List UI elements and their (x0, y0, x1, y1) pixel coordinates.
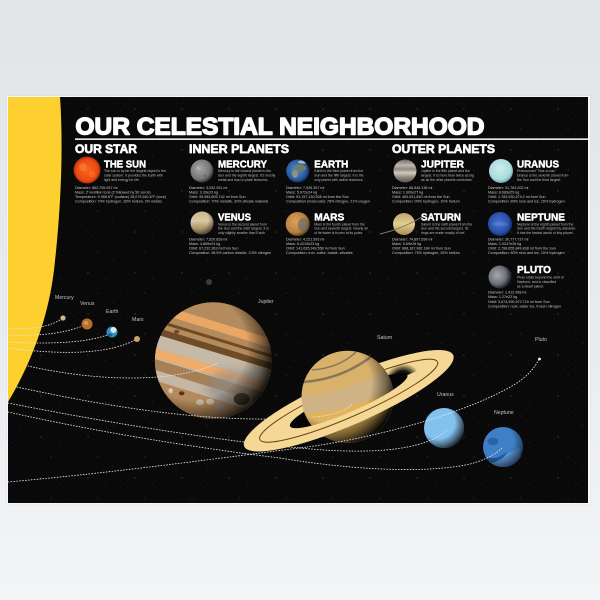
description (421, 222, 472, 235)
stats: Diameter: 3,032.291 mi (189, 186, 228, 190)
stats (488, 186, 565, 204)
stats: Orbit: 888,187,982.184 mi from Sun (392, 247, 451, 251)
description (218, 222, 269, 235)
stats: Mass: 1.0247e26 kg (488, 242, 521, 246)
stats (392, 237, 460, 255)
description: Sun and the fourth largest by diameter. (517, 227, 576, 231)
poster (6, 96, 590, 506)
stats: Diameter: 30,777.737 mi (488, 237, 529, 241)
description: Sun and the second largest. Its (421, 227, 469, 231)
icon: earth (286, 160, 309, 182)
description (517, 222, 576, 235)
description: Saturn is the sixth planet from the (421, 222, 472, 226)
panel: saturn (380, 212, 472, 255)
stats (286, 186, 370, 204)
planet labels: Saturn (377, 335, 392, 341)
stats: Composition: 70% hydrogen, 28% helium, 2% metals (75, 200, 162, 204)
planet: mars (134, 336, 140, 342)
stats: Composition: iron, sulfur, basalt, silicates (286, 251, 353, 255)
planet labels: Uranus (437, 392, 454, 398)
stats: Mass: 5.69e26 kg (392, 242, 421, 246)
stats: Diameter: 88,846.138 mi (392, 186, 433, 190)
name: JUPITER (421, 160, 464, 171)
name: MARS (314, 212, 344, 223)
star: faint dot (206, 279, 212, 285)
planet labels: Neptune (494, 410, 514, 416)
planet labels: Mars (132, 317, 144, 323)
description: the Sun and the third largest. (517, 178, 561, 182)
panel: uranus (488, 159, 569, 204)
stats: Mass: 3.30e23 kg (189, 191, 218, 195)
ring shadow (382, 360, 422, 394)
stats: Orbit: 1,783,930,479.2 mi from Sun (488, 195, 546, 199)
heading: our star: OUR STAR (75, 143, 138, 156)
stats (286, 237, 353, 255)
planet labels: Venus (80, 301, 95, 307)
planet: neptune (483, 427, 523, 470)
name: VENUS (218, 212, 251, 223)
description: Sun and the eighth largest. It's mostly (218, 174, 275, 178)
name: MERCURY (218, 160, 267, 171)
stats: Mass: 5.972e24 kg (286, 191, 317, 195)
stats: Mass: 1.900e27 kg (392, 191, 423, 195)
globe (300, 351, 395, 445)
stats: Diameter: 863,705.937 mi (75, 186, 118, 190)
planet labels: Earth (106, 309, 119, 315)
sun edge (8, 97, 62, 402)
description: the Sun and the sixth largest. It is (218, 227, 269, 231)
description (517, 169, 569, 182)
name: NEPTUNE (517, 212, 565, 223)
description: only slightly smaller than Earth. (218, 231, 266, 235)
stats: Mass: 6.4219e23 kg (286, 242, 319, 246)
panel: neptune (488, 212, 576, 255)
name: THE SUN (104, 160, 146, 171)
description: Mercury is the closest planet to the (218, 169, 271, 173)
stats: Orbit: 3,674,490,972.719 mi from Sun (488, 300, 550, 304)
stats: Orbit: 2,798,655,849.838 mi from the Sun (488, 247, 556, 251)
stats: Orbit: 35,983,605.742 mi from Sun (189, 195, 246, 199)
stats (488, 291, 561, 309)
description: only planet with active tectonics. (314, 178, 363, 182)
description: as a dwarf planet. (517, 284, 544, 288)
planet: jupiter (154, 302, 272, 420)
rings: front half (244, 355, 463, 468)
stats: Composition: 90% hydrogen, 10% helium (392, 200, 460, 204)
description: light and energy for life. (104, 178, 140, 182)
rings: back half (235, 333, 463, 468)
icon: mercury (190, 160, 214, 182)
planet: saturn (244, 350, 454, 452)
description: Mars is the fourth planet from the (314, 222, 365, 226)
stats (392, 186, 460, 204)
icon: saturn (380, 213, 422, 235)
icon: venus (190, 212, 214, 234)
panel: earth (286, 160, 370, 204)
description (517, 276, 564, 288)
orbit lines over outer planets (280, 359, 539, 470)
panel: venus (189, 212, 271, 255)
icon: neptune (488, 212, 512, 236)
description: solar system. It provides the Earth with (104, 174, 163, 178)
title: OUR CELESTIAL NEIGHBORHOOD (76, 114, 484, 141)
title rule (75, 138, 588, 140)
stats: Orbit: 67,232,363 mi from Sun (189, 247, 238, 251)
description: largest. It is more than twice as big (421, 174, 474, 178)
stats: Temperature: 9,980.6°F (surface) 28,079,540.6°F (core) (75, 195, 166, 199)
description (421, 169, 474, 182)
description: metal and has no plate tectonics. (218, 178, 268, 182)
icon: pluto (488, 266, 512, 288)
orbit lines (8, 320, 306, 482)
name: EARTH (314, 160, 348, 171)
icon: jupiter (394, 160, 416, 182)
stats: Orbit: 141,635,349.558 mi from Sun (286, 247, 345, 251)
description: Sun and seventh largest. Nearly all (314, 227, 368, 231)
stats (189, 186, 268, 204)
stats (189, 237, 271, 255)
icon: mars (286, 212, 310, 236)
stats: Composition: rock, water ice, frozen nitrogen (488, 305, 561, 309)
description: Pluto orbits beyond the orbit of (517, 276, 564, 280)
stats: Composition: 80% rock and ice, 15% hydrogen (488, 251, 565, 255)
heading: outer planets: OUTER PLANETS (392, 143, 495, 156)
description: Neptune is the eighth planet from the (517, 222, 573, 226)
stats: Diameter: 31,763.202 mi (488, 186, 529, 190)
name: PLUTO (517, 265, 551, 276)
stats: Mass: 8.683e25 kg (488, 191, 519, 195)
description: Uranus is the seventh planet from (517, 174, 569, 178)
stats (75, 186, 166, 204)
panel: pluto (488, 265, 564, 309)
stats: Orbit: 93,157,130.508 mi from the Sun (286, 195, 349, 199)
stats: Diameter: 1,412.998 mi (488, 291, 527, 295)
stats: Diameter: 7,926.397 mi (286, 186, 325, 190)
description (314, 222, 368, 235)
name: SATURN (421, 212, 461, 223)
stats: Mass: 4.869e24 kg (189, 242, 220, 246)
panel: the sun (74, 156, 166, 204)
stats: Composition: 80% rock and ice, 15% hydrogen (488, 200, 565, 204)
stats: Diameter: 74,897.599 mi (392, 237, 433, 241)
orbit over saturn (313, 403, 353, 417)
stats: Composition (molecular): 78% nitrogen, 21% oxygen (286, 200, 370, 204)
description (314, 169, 364, 182)
planet: uranus (424, 408, 464, 448)
panel: jupiter (392, 160, 474, 204)
panel: mars (286, 212, 368, 255)
stats: Mass: 1.27e22 kg (488, 295, 517, 299)
stats: Orbit: 483,631,840 mi from the Sun (392, 195, 450, 199)
description: of its water is frozen at its poles. (314, 231, 363, 235)
description (218, 169, 275, 182)
description: Pronounced "Yoor-a-nus," (517, 169, 557, 173)
planet: pluto (538, 358, 541, 360)
description: Neptune, and is classified (517, 280, 556, 284)
description: rings are made mostly of ice. (421, 231, 465, 235)
description: Earth is the third planet from the (314, 169, 363, 173)
stats: Diameter: 7,520.828 mi (189, 237, 228, 241)
stats (488, 237, 565, 255)
planet: venus (82, 318, 92, 330)
stats: Composition: 96.5% carbon dioxide, 3.5% nitrogen (189, 251, 271, 255)
description: The sun is by far the largest object in the (104, 169, 166, 173)
stats: Composition: 75% hydrogen, 25% helium (392, 251, 460, 255)
planet labels: Pluto (535, 337, 547, 343)
planet labels (55, 295, 547, 416)
planet labels: Mercury (55, 295, 74, 301)
icon: sun (74, 156, 100, 184)
planet: earth (106, 326, 118, 338)
stats: Composition: 70% metallic, 30% silicate material (189, 200, 268, 204)
description: Jupiter is the fifth planet and the (421, 169, 470, 173)
description: Venus is the second planet from (218, 222, 267, 226)
stats: Diameter: 4,221.593 mi (286, 237, 325, 241)
description (104, 169, 166, 182)
description: as all the other planets combined. (421, 178, 472, 182)
description: Sun and the fifth largest. It is the (314, 174, 364, 178)
heading: inner planets: INNER PLANETS (189, 143, 289, 156)
stats: Mass: 2 nonillion tons (2 followed by 30 zeros) (75, 191, 151, 195)
name: URANUS (517, 160, 559, 171)
description: It has the fastest winds of any planet. (517, 231, 574, 235)
planet labels: Jupiter (258, 299, 274, 305)
panel: mercury (189, 160, 275, 204)
icon: uranus (489, 159, 513, 183)
planet: mercury (60, 315, 66, 321)
